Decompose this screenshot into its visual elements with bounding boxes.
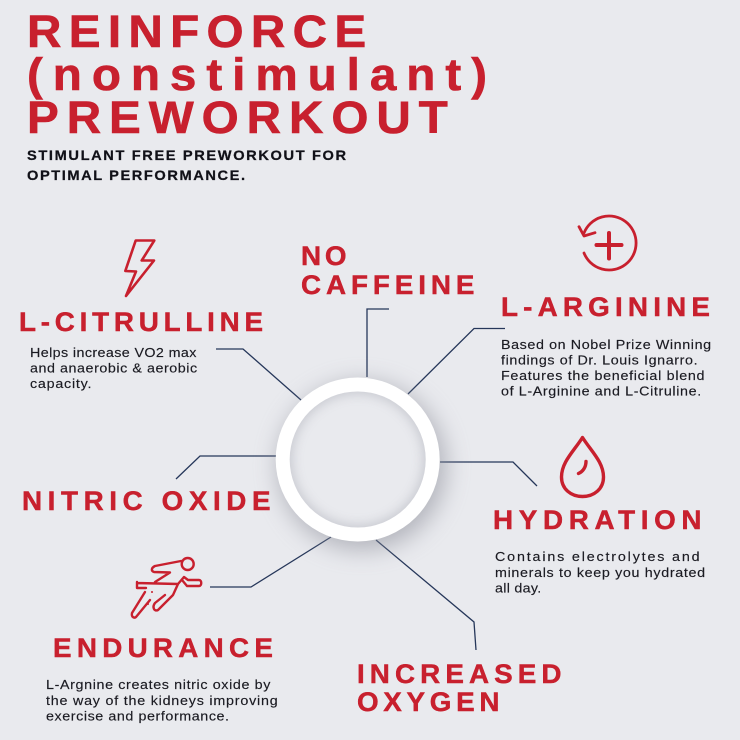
label: no caffeine: CAFFEINE <box>301 270 474 300</box>
panel: l-arginine: of L-Arginine and L-Citruline. <box>501 384 701 399</box>
icon: running figure <box>132 558 201 618</box>
label: no caffeine: NO <box>301 241 346 271</box>
panel: l-arginine: Based on Nobel Prize Winning <box>501 338 711 352</box>
panel: hydration: Contains electrolytes and <box>495 550 700 564</box>
panel: l-citrulline: L-CITRULLINE <box>19 307 263 337</box>
title: (nonstimulant) <box>27 49 487 100</box>
panel: l-citrulline <box>19 307 263 391</box>
panel: l-arginine <box>501 292 711 399</box>
panel: l-citrulline: Helps increase VO2 max <box>30 346 197 360</box>
label: no caffeine <box>301 241 474 300</box>
subtitle <box>27 148 346 184</box>
panel: endurance: ENDURANCE <box>53 633 273 663</box>
label: increased oxygen <box>357 659 562 717</box>
panel: l-citrulline: capacity. <box>30 377 91 391</box>
label: increased oxygen: OXYGEN <box>357 687 499 717</box>
panel: l-arginine: L-ARGININE <box>501 292 710 322</box>
panel: endurance: L-Argnine creates nitric oxide by <box>46 678 271 692</box>
title <box>27 6 487 143</box>
icon: water drop <box>562 438 604 496</box>
connector lines <box>176 309 537 650</box>
panel: hydration <box>493 505 705 595</box>
panel: hydration: minerals to keep you hydrated <box>495 566 705 580</box>
panel: l-arginine: findings of Dr. Louis Ignarro. <box>501 353 698 367</box>
title: REINFORCE <box>27 6 366 57</box>
subtitle: STIMULANT FREE PREWORKOUT FOR <box>27 148 346 164</box>
panel: endurance <box>46 633 278 724</box>
subtitle: OPTIMAL PERFORMANCE. <box>27 168 245 184</box>
panel: hydration: all day. <box>495 581 541 595</box>
icon: lightning bolt <box>125 240 154 296</box>
title: PREWORKOUT <box>27 92 448 143</box>
panel: hydration: HYDRATION <box>493 505 702 535</box>
label: increased oxygen: INCREASED <box>357 659 562 689</box>
central ring <box>276 378 446 550</box>
panel: l-citrulline: and anaerobic & aerobic <box>30 361 197 376</box>
label: nitric oxide: NITRIC OXIDE <box>22 486 271 516</box>
panel: l-arginine: Features the beneficial blend <box>501 369 704 383</box>
panel: endurance: the way of the kidneys improving <box>46 694 278 708</box>
panel: endurance: exercise and performance. <box>46 709 229 724</box>
icon: circular arrow with plus <box>579 216 636 270</box>
